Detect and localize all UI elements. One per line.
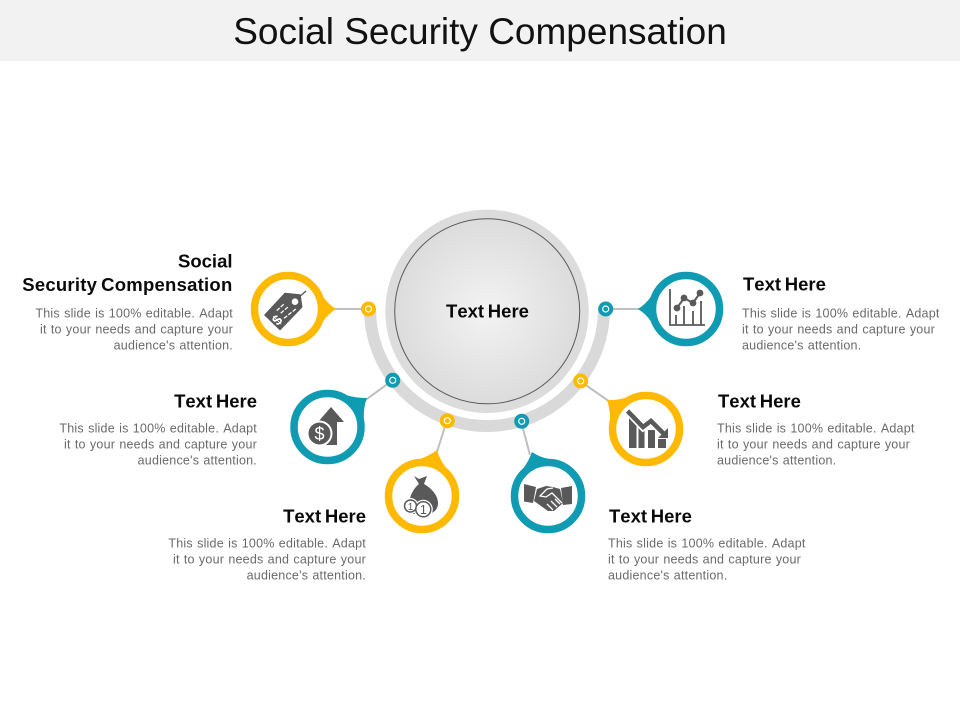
node: tag bbox=[254, 276, 336, 342]
text block: left lower: audience's attention. bbox=[247, 569, 366, 583]
text block: right upper: Text Here bbox=[743, 274, 826, 294]
lower arc bbox=[370, 309, 604, 426]
text block: left middle: This slide is 100% editable. Adapt bbox=[59, 422, 257, 436]
text block: social security compensation: it to your needs and capture your bbox=[40, 323, 233, 337]
text block: right middle: This slide is 100% editable. Adapt bbox=[717, 422, 915, 436]
icon: money bag with coins bbox=[402, 476, 438, 519]
text block: left middle: Text Here bbox=[174, 390, 257, 412]
text block: right upper: it to your needs and capture your bbox=[742, 323, 935, 337]
text block: right upper: This slide is 100% editable. Adapt bbox=[742, 307, 940, 321]
icon: money bag with coins: 1 bbox=[420, 503, 427, 517]
node: line chart bbox=[638, 276, 720, 342]
text block: right middle: Text Here bbox=[718, 390, 801, 412]
text block: social security compensation bbox=[22, 251, 233, 353]
node: handshake bbox=[514, 452, 582, 530]
icon: money bag with coins: 1 bbox=[408, 502, 414, 513]
text block: social security compensation: Security Compensation bbox=[22, 274, 232, 295]
text block: social security compensation: This slide is 100% editable. Adapt bbox=[35, 307, 233, 321]
central circle bbox=[385, 210, 589, 413]
text block: left lower: This slide is 100% editable. Adapt bbox=[168, 537, 366, 551]
title: Social Security Compensation bbox=[233, 11, 727, 52]
icon: handshake bbox=[524, 484, 572, 511]
text block: right lower: audience's attention. bbox=[608, 569, 727, 583]
text block: right middle: audience's attention. bbox=[717, 454, 836, 468]
node: money bag bbox=[388, 450, 456, 530]
node: falling chart bbox=[607, 396, 680, 462]
text block: right middle bbox=[717, 390, 915, 468]
icon: falling bar chart bbox=[628, 411, 668, 448]
text block: right upper bbox=[742, 274, 940, 353]
title band bbox=[0, 0, 960, 61]
text block: left lower: Text Here bbox=[283, 506, 366, 526]
central label: Text Here bbox=[446, 300, 529, 322]
text block: right lower: it to your needs and capture your bbox=[608, 553, 801, 567]
icon: price tag: $ bbox=[269, 311, 286, 328]
text block: social security compensation: Social bbox=[178, 251, 232, 272]
text block: right lower: Text Here bbox=[609, 506, 692, 526]
text block: social security compensation: audience's attention. bbox=[114, 339, 233, 353]
text block: right lower bbox=[608, 506, 806, 583]
icon: line and bar chart bbox=[670, 289, 705, 325]
icon: dollar coin with up arrow: $ bbox=[314, 424, 325, 444]
text block: right upper: audience's attention. bbox=[742, 339, 861, 353]
text block: left middle: it to your needs and capture your bbox=[64, 438, 257, 452]
connector dots bbox=[361, 302, 613, 429]
text block: left middle: audience's attention. bbox=[138, 454, 257, 468]
node: dollar arrow bbox=[294, 394, 367, 460]
text block: left lower bbox=[168, 506, 366, 583]
text block: right middle: it to your needs and capture your bbox=[717, 438, 910, 452]
connector lines bbox=[330, 309, 640, 455]
text block: left middle bbox=[59, 390, 257, 468]
text block: left lower: it to your needs and capture your bbox=[173, 553, 366, 567]
text block: right lower: This slide is 100% editable. Adapt bbox=[608, 537, 806, 551]
